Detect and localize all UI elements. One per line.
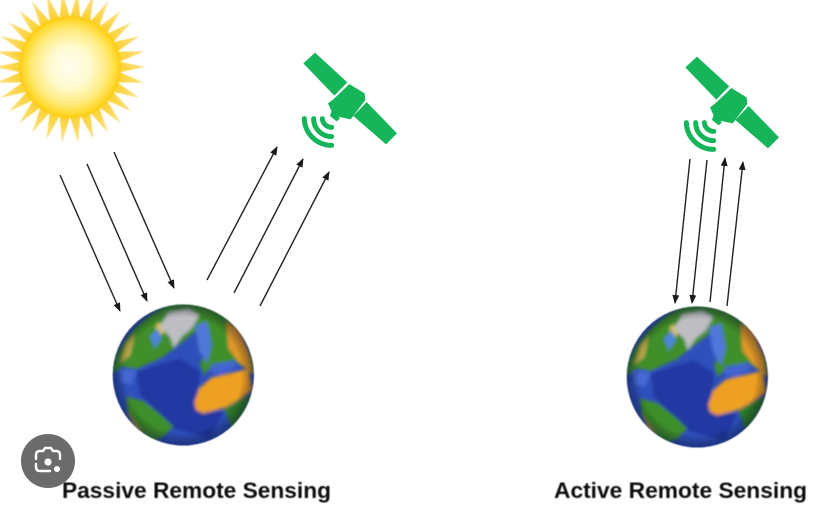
- icon: lens button: [21, 434, 75, 488]
- icon: passive satellite: [303, 53, 397, 145]
- icon: active satellite: [685, 57, 779, 149]
- arrows: active signal down and return up: [675, 158, 743, 306]
- icon: sun: [0, 0, 146, 143]
- heading: passive remote sensing: Passive Remote Sensing: [62, 478, 331, 503]
- arrows: sunlight down to Earth: [60, 152, 174, 311]
- heading: active remote sensing: Active Remote Sensing: [554, 478, 807, 503]
- arrows: reflected up to satellite: [207, 147, 329, 306]
- icon: passive globe: [110, 302, 255, 446]
- icon: active globe: [624, 304, 769, 448]
